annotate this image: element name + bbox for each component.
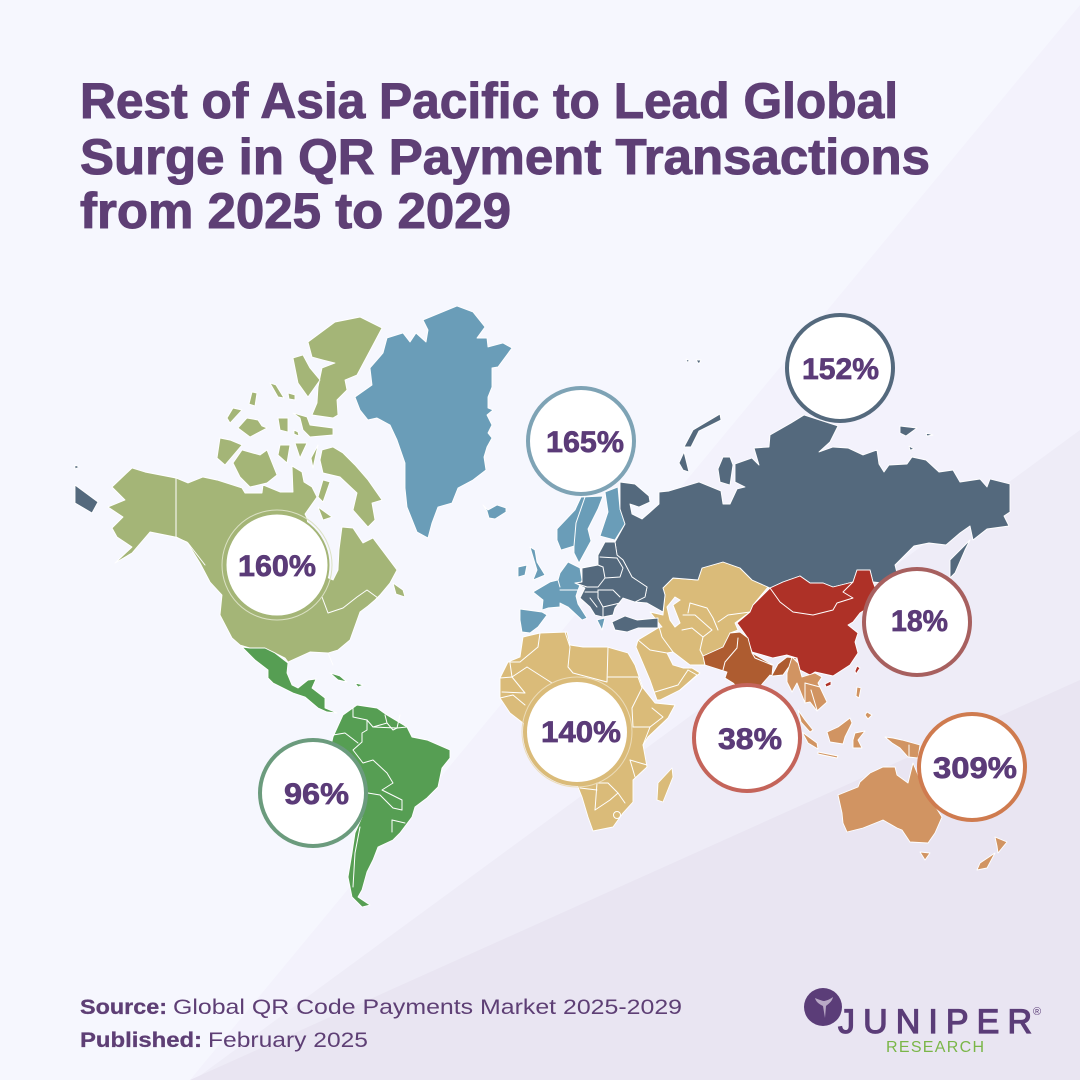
region: Russia and Eastern Europe xyxy=(75,359,1010,632)
region: Rest of Asia Pacific xyxy=(787,657,1007,870)
logo: Juniper Research: RESEARCH xyxy=(886,1039,984,1056)
icon: logo mark xyxy=(804,988,842,1026)
callout: 165%: 165% xyxy=(546,426,624,459)
callout: 165% xyxy=(528,388,634,494)
source and publication note: Source: xyxy=(80,996,167,1019)
region: Latin America xyxy=(242,647,450,907)
region: Africa, Middle East and Central Asia xyxy=(500,562,768,831)
callout: 152% xyxy=(787,315,893,421)
region: Greenland and Western Europe xyxy=(355,306,625,633)
callout: 96% xyxy=(260,740,366,846)
logo: Juniper Research: JUNIPER xyxy=(838,1003,1032,1041)
callout: 140% xyxy=(522,677,632,787)
Caspian Sea xyxy=(667,597,680,627)
title xyxy=(80,73,930,239)
logo: Juniper Research: ® xyxy=(1033,1006,1041,1018)
callout: 160%: 160% xyxy=(238,550,316,583)
source and publication note xyxy=(80,996,682,1052)
source and publication note: Published: xyxy=(80,1029,202,1052)
callout: 160% xyxy=(222,510,332,620)
title: Rest of Asia Pacific to Lead Global xyxy=(80,73,898,129)
title: Surge in QR Payment Transactions xyxy=(80,129,930,185)
callout: 38%: 38% xyxy=(718,723,782,756)
region: South Asia xyxy=(703,632,797,700)
source and publication note: Global QR Code Payments Market 2025-2029 xyxy=(173,996,682,1019)
region: North America xyxy=(108,317,405,665)
source and publication note: February 2025 xyxy=(208,1029,368,1052)
callout: 140%: 140% xyxy=(541,716,621,749)
world map xyxy=(75,306,1010,907)
callout: 309% xyxy=(919,714,1025,820)
callout: 18%: 18% xyxy=(891,605,948,638)
callout: 38% xyxy=(694,685,800,791)
callout: 152%: 152% xyxy=(802,353,879,386)
logo: Juniper Research xyxy=(804,988,1041,1056)
callout: 96%: 96% xyxy=(284,778,349,811)
title: from 2025 to 2029 xyxy=(80,183,511,239)
region: China xyxy=(737,570,880,687)
callout: 18% xyxy=(864,569,970,675)
callout: 309%: 309% xyxy=(933,752,1017,785)
